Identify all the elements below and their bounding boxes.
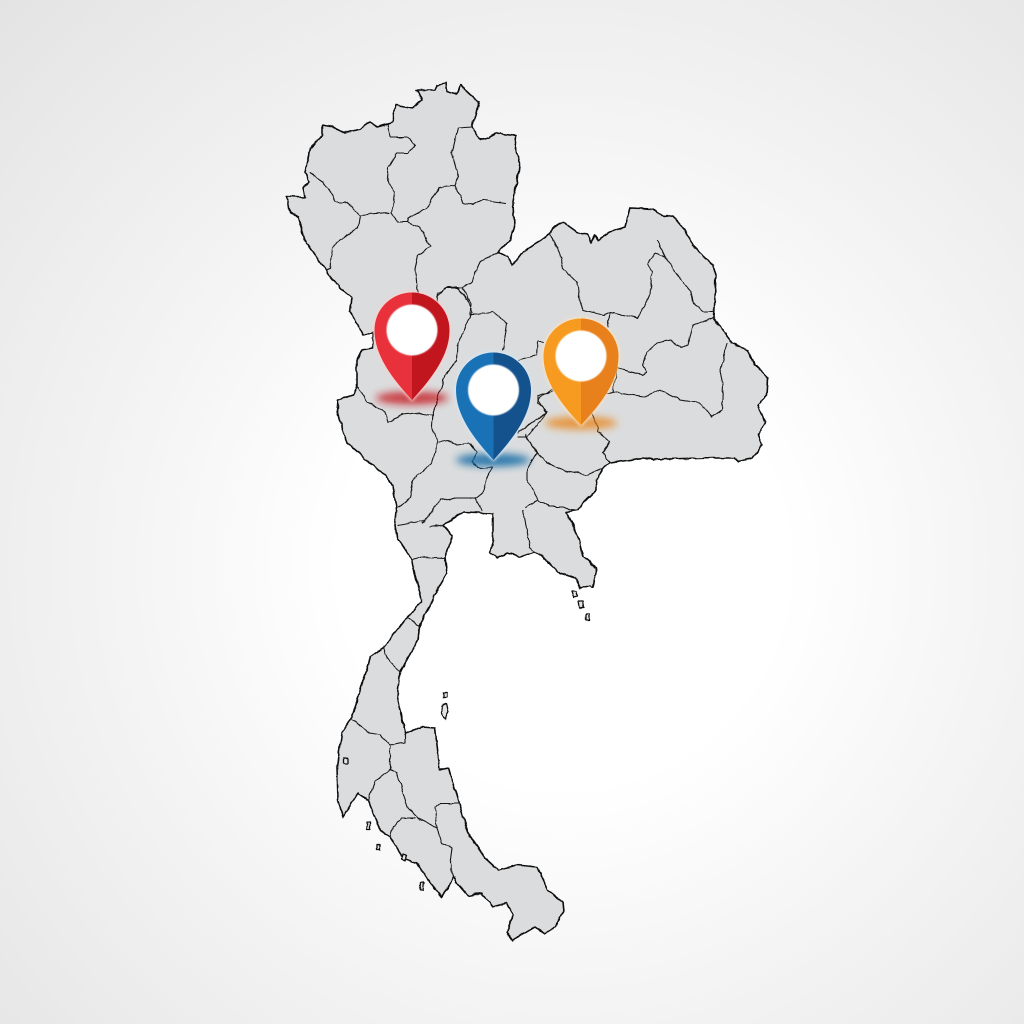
red pin body [374, 292, 450, 400]
blue pin shadow [456, 454, 530, 466]
map landmass outline [287, 83, 768, 940]
red pin shadow [376, 392, 448, 404]
pin: orange [544, 318, 618, 430]
orange pin shadow [545, 416, 617, 430]
islands [344, 591, 589, 890]
orange pin body [544, 318, 618, 425]
blue pin body [456, 352, 531, 460]
map: Thailand [287, 83, 768, 940]
pin: blue [456, 352, 531, 466]
province borders [310, 123, 727, 877]
pin: red [374, 292, 450, 404]
